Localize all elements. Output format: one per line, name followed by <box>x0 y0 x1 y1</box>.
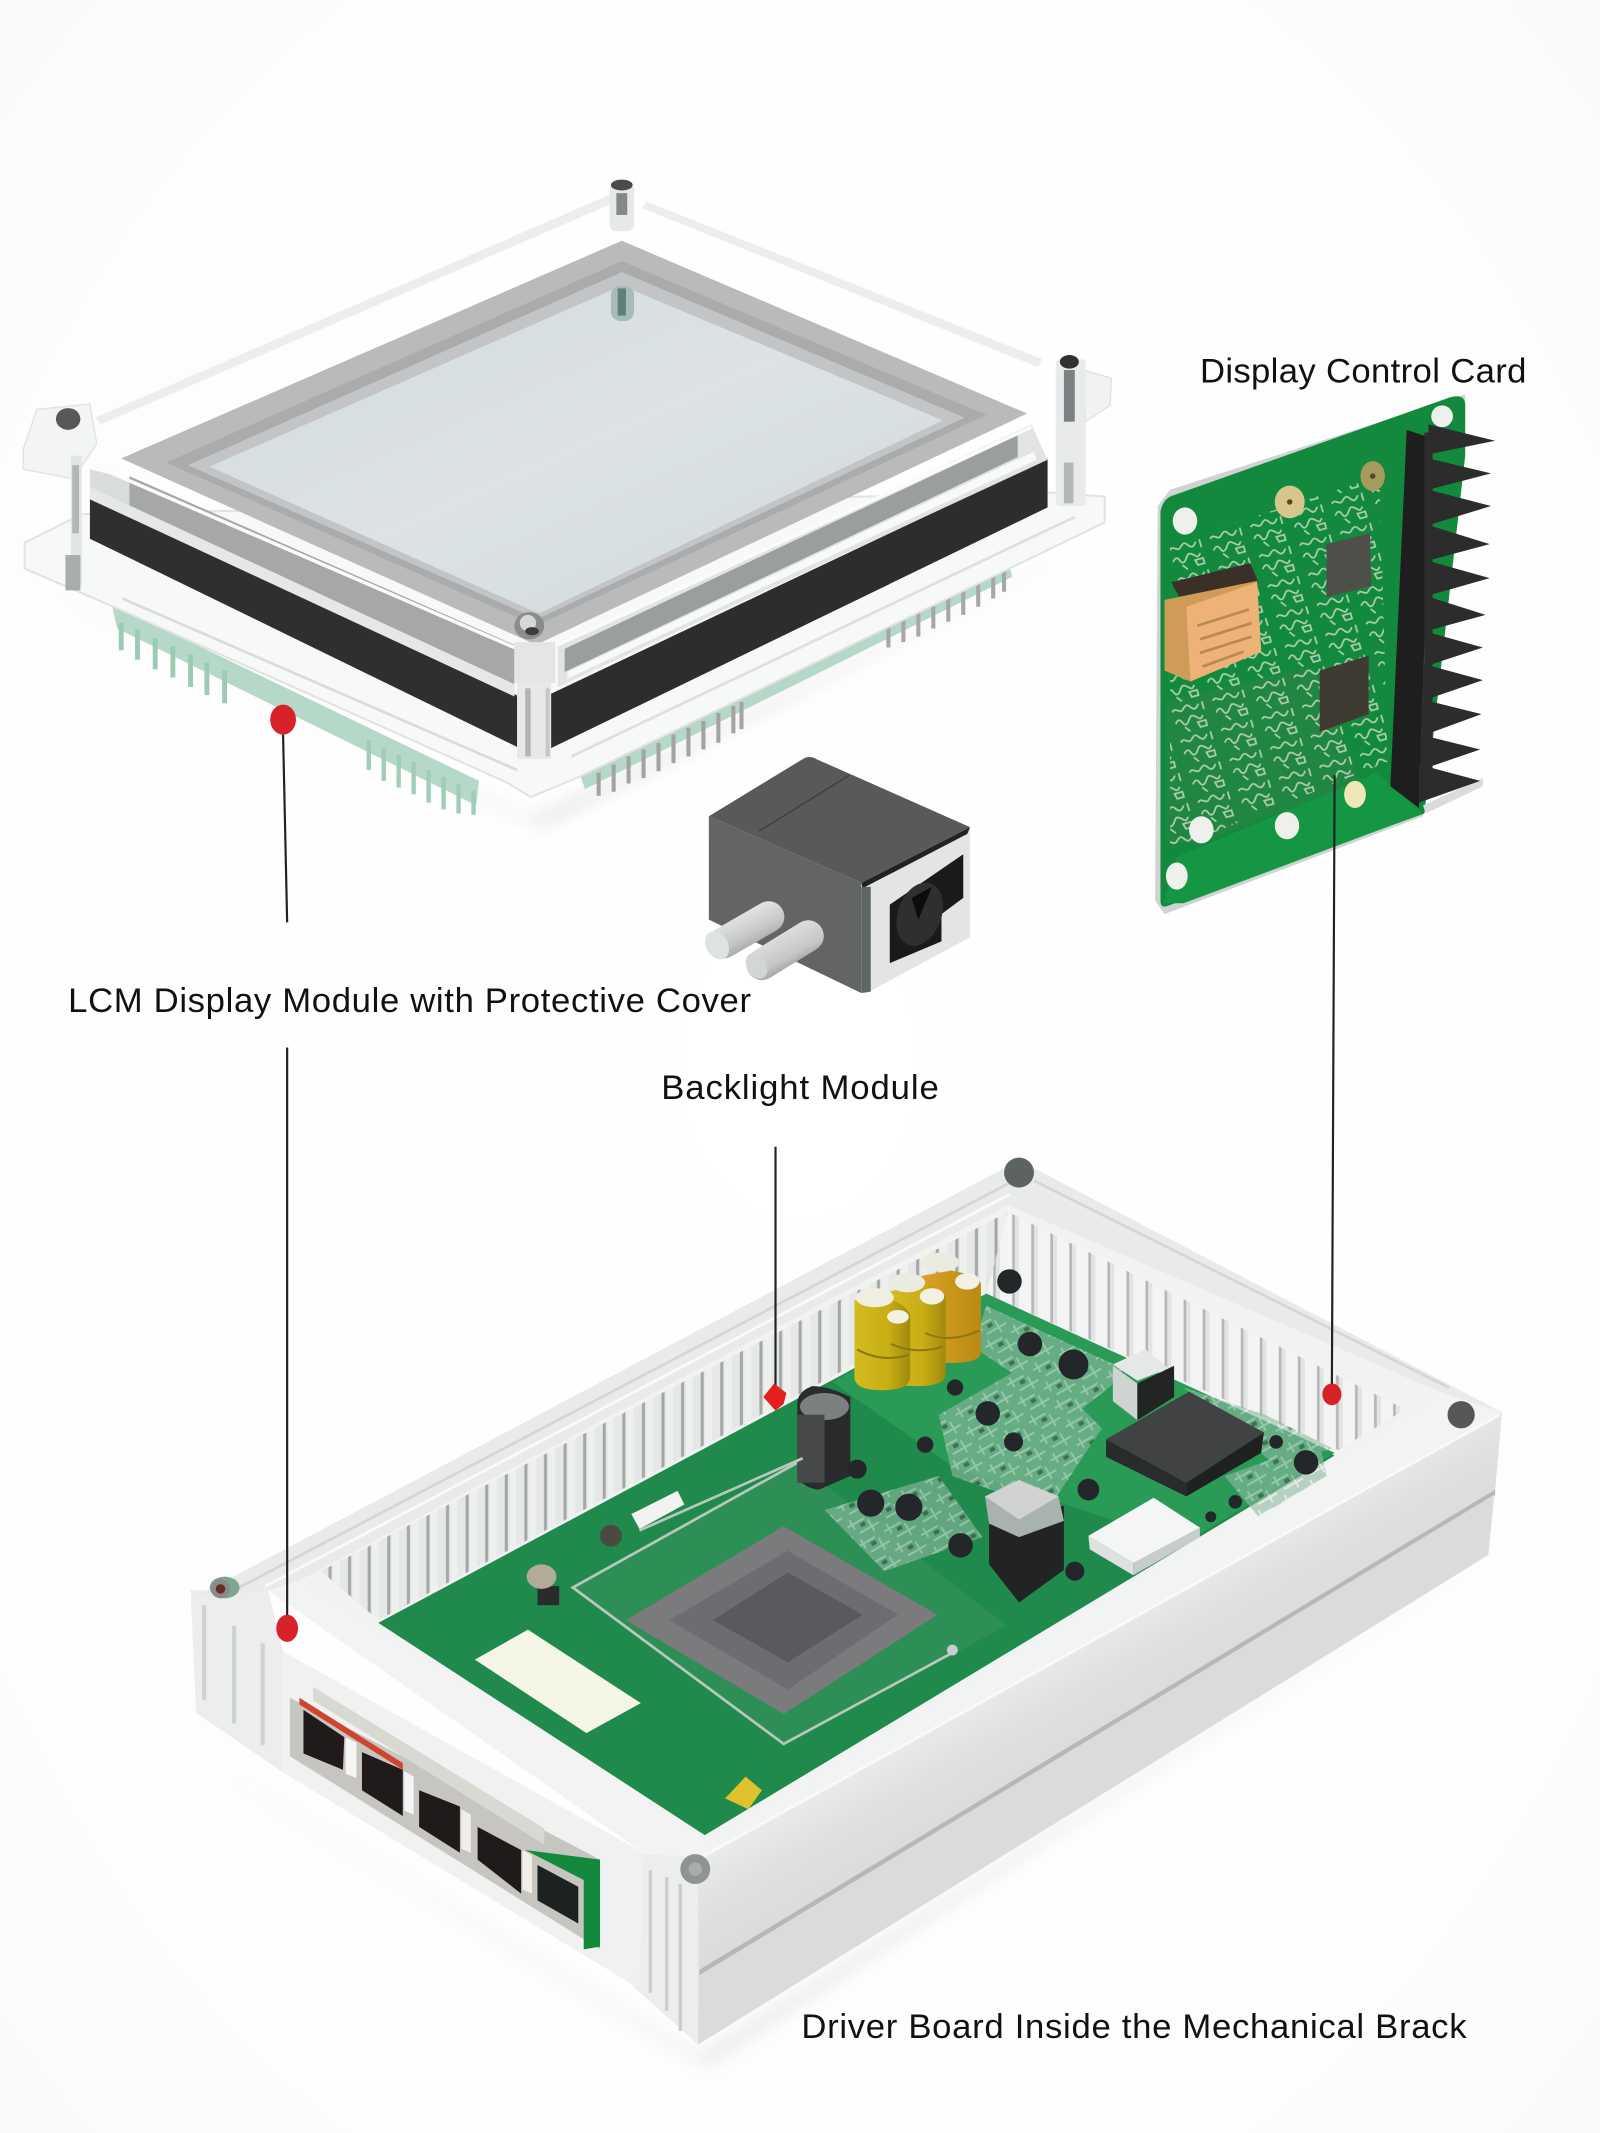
panel: display control card <box>1155 394 1495 914</box>
glass circuit areas <box>824 1306 1333 1571</box>
glass edge strips of top cover <box>90 424 1048 696</box>
left face <box>709 816 861 993</box>
cylinder pins <box>700 917 808 982</box>
left post <box>23 404 97 590</box>
front post with screw <box>514 612 555 759</box>
top face <box>709 757 970 883</box>
printed traces <box>1170 476 1388 850</box>
lamp socket <box>888 854 963 963</box>
green circuit board <box>378 1294 1335 1835</box>
panel: LCM display module with protective cover <box>23 180 1112 922</box>
LCD screen <box>210 286 943 614</box>
capacitors <box>797 1253 981 1490</box>
black power chip <box>1106 1392 1264 1496</box>
white block <box>1088 1498 1200 1575</box>
back post <box>610 180 634 231</box>
callout marker: driver board <box>276 1047 298 1642</box>
circuit board under module with pins <box>112 566 1012 815</box>
side wall of enclosure <box>698 1412 1502 2045</box>
ethernet ports <box>303 1710 578 1924</box>
reflected post <box>611 286 634 321</box>
enclosure screws <box>210 1158 1475 1884</box>
front face <box>861 827 970 993</box>
label: Backlight Module: Backlight Module <box>661 1069 939 1107</box>
callout marker: backlight <box>763 1147 786 1411</box>
small components <box>848 1269 1318 1581</box>
black spacer band <box>90 458 1048 751</box>
callout marker: control card <box>1322 775 1341 1405</box>
top acrylic cover plate <box>95 192 1042 648</box>
label: Driver Board Inside the Mechanical Brack: Driver Board Inside the Mechanical Brack <box>801 2008 1467 2046</box>
small silver component <box>1113 1349 1174 1420</box>
panel: driver board inside mechanical bracket <box>191 775 1502 2068</box>
heatsink <box>1390 424 1495 813</box>
callout marker: LCM <box>270 705 296 922</box>
label: Display Control Card: Display Control Card <box>1200 352 1526 390</box>
top rim of enclosure <box>195 1160 1502 1857</box>
transformer <box>1165 563 1261 682</box>
green circuit board <box>1160 396 1465 907</box>
mounting holes <box>1166 405 1453 890</box>
resistors and connector pads <box>527 1458 958 1809</box>
corner fins <box>633 1853 698 2045</box>
right post <box>1056 355 1112 506</box>
label: LCM Display Module with Protective Cover: LCM Display Module with Protective Cover <box>68 982 751 1020</box>
bottom acrylic plate <box>25 492 1105 797</box>
panel: backlight module <box>700 757 970 993</box>
card edge <box>1155 394 1465 914</box>
inductor <box>985 1480 1064 1602</box>
front port panel <box>283 1651 644 1989</box>
white label <box>475 1630 641 1733</box>
gray display frame <box>121 241 1027 645</box>
processor chip <box>573 1460 952 1744</box>
cavity base <box>299 1205 1442 1835</box>
chips <box>1320 533 1371 732</box>
ribbed inner walls <box>321 1212 1008 1620</box>
